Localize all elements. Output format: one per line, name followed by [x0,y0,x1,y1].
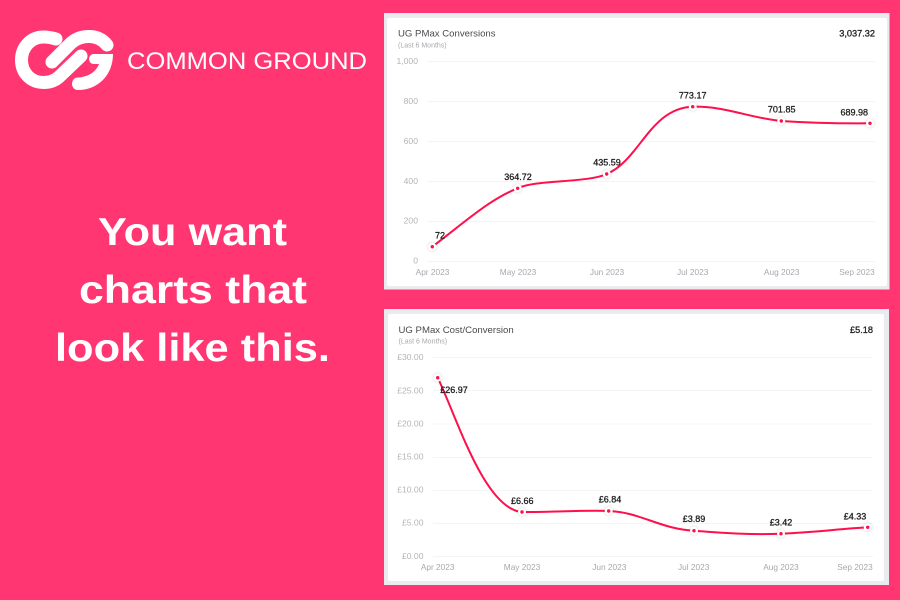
data labels: 435.59 [593,158,621,168]
data labels: 701.85 [768,105,795,115]
x axis labels: Aug 2023 [764,267,800,277]
logo: Common Ground [22,36,367,90]
line chart: conversions [432,107,870,247]
x axis labels: Jul 2023 [677,267,709,277]
chart title: UG PMax Conversions [398,29,496,40]
data points [428,103,874,251]
chart title: UG PMax Cost/Conversion [398,325,514,336]
y axis and gridlines: £0.00 [402,551,424,561]
data labels [435,90,868,241]
y axis and gridlines: 600 [404,136,418,146]
y axis and gridlines [397,352,873,561]
y axis and gridlines: 200 [404,216,418,226]
y axis and gridlines: £25.00 [397,386,424,396]
headline: charts that [79,269,307,312]
logo wordmark: COMMON GROUND [127,48,367,75]
headline: You want [98,211,287,254]
x axis labels: Apr 2023 [416,267,450,277]
chart subtitle: (Last 6 Months) [398,338,447,345]
x axis labels: May 2023 [504,562,541,572]
data points [434,374,872,538]
x axis labels: Sep 2023 [837,562,873,572]
line chart: cost per conversion [438,378,868,534]
data labels: 72 [435,231,445,241]
x axis labels: Aug 2023 [763,562,799,572]
data labels: £6.66 [511,496,534,506]
y axis and gridlines: 800 [404,96,418,106]
headline: look like this. [55,327,330,370]
x axis labels: May 2023 [500,267,537,277]
y axis and gridlines: £15.00 [397,452,424,462]
x axis labels: Jul 2023 [678,562,710,572]
y axis and gridlines: £20.00 [397,418,424,428]
data labels: 773.17 [679,90,706,100]
data labels: £26.97 [440,385,468,395]
data labels: £4.33 [844,511,866,521]
x axis labels: Jun 2023 [592,562,627,572]
y axis and gridlines: 1,000 [396,56,418,66]
y axis and gridlines: £5.00 [402,518,424,528]
x axis labels [421,562,873,572]
x axis labels [416,267,875,277]
data labels [440,385,866,527]
data labels: 689.98 [841,107,868,117]
data labels: 364.72 [504,172,532,182]
headline [55,211,330,370]
data labels: £3.42 [770,517,792,527]
y axis and gridlines: £30.00 [397,352,424,362]
y axis and gridlines: 400 [404,176,418,186]
x axis labels: Apr 2023 [421,562,455,572]
total value: 3,037.32 [839,29,875,39]
x axis labels: Jun 2023 [590,267,624,277]
x axis labels: Sep 2023 [839,267,875,277]
panel: UG PMax Cost/Conversion [384,309,889,585]
data labels: £6.84 [599,495,621,505]
panel: UG PMax Conversions [384,13,890,290]
y axis and gridlines: 0 [413,256,418,266]
y axis and gridlines [396,56,875,266]
icon: interlinked CG mark [22,36,113,90]
chart subtitle: (Last 6 Months) [398,43,447,50]
total value: £5.18 [850,325,873,335]
data labels: £3.89 [683,514,705,524]
y axis and gridlines: £10.00 [397,484,424,494]
